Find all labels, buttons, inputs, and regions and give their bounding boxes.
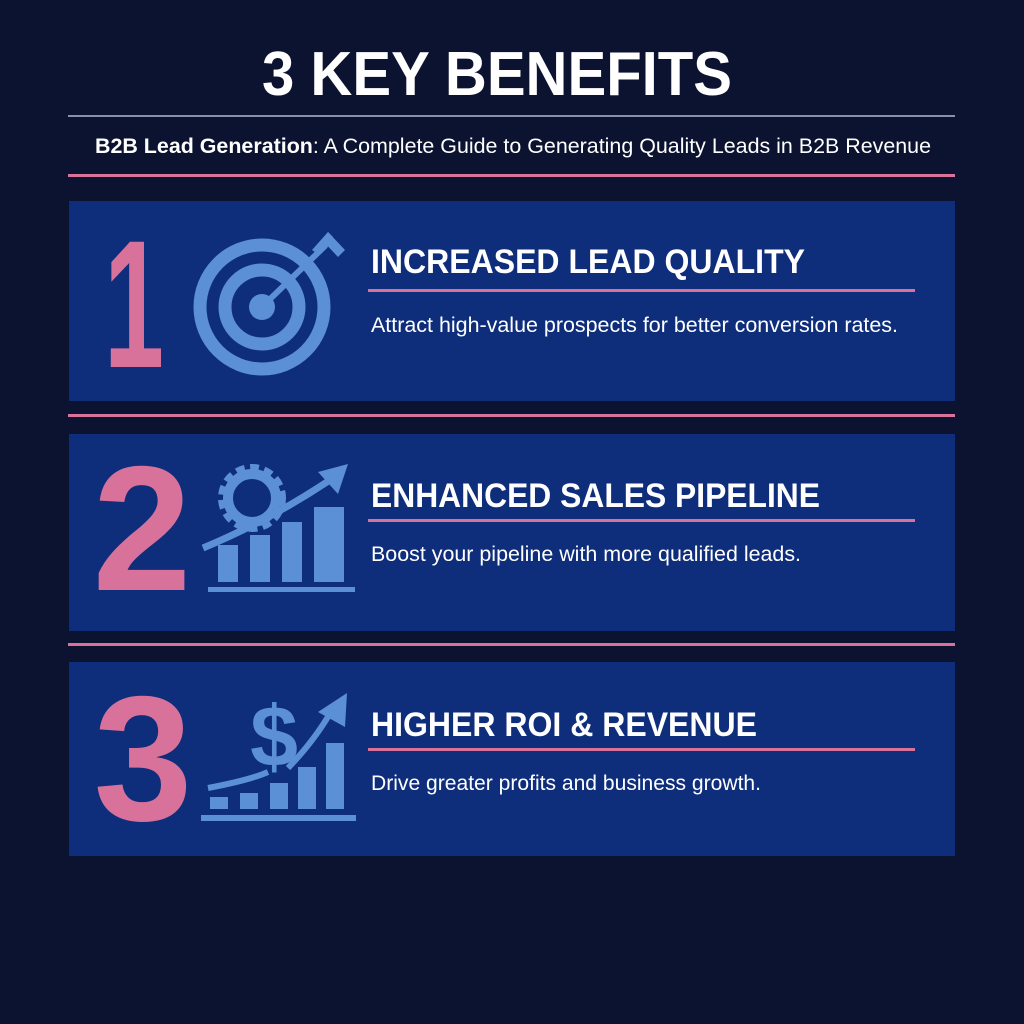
- icon: gear and growth chart: [203, 464, 355, 592]
- number 3: 3: [94, 659, 192, 858]
- heading 1: INCREASED LEAD QUALITY: [371, 243, 805, 281]
- description 1: Attract high-value prospects for better conversion rates.: [371, 314, 898, 337]
- number 1: 1: [104, 202, 164, 406]
- description 2: Boost your pipeline with more qualified leads.: [371, 543, 801, 566]
- icon: dollar and growth chart: [201, 689, 356, 821]
- panel: benefit 1: [69, 201, 955, 406]
- number 2: 2: [92, 429, 192, 628]
- description 3: Drive greater profits and business growth.: [371, 772, 761, 795]
- heading 2: ENHANCED SALES PIPELINE: [371, 477, 820, 515]
- icon: dollar and growth chart: $: [250, 689, 298, 785]
- title: 3 KEY BENEFITS: [262, 40, 732, 109]
- icon: target with arrow: [200, 232, 345, 369]
- panel: benefit 3: [69, 659, 955, 858]
- heading 3: HIGHER ROI & REVENUE: [371, 706, 757, 744]
- subtitle: B2B Lead Generation: A Complete Guide to Generating Quality Leads in B2B Revenue: [95, 135, 931, 158]
- panel: benefit 2: [69, 429, 955, 631]
